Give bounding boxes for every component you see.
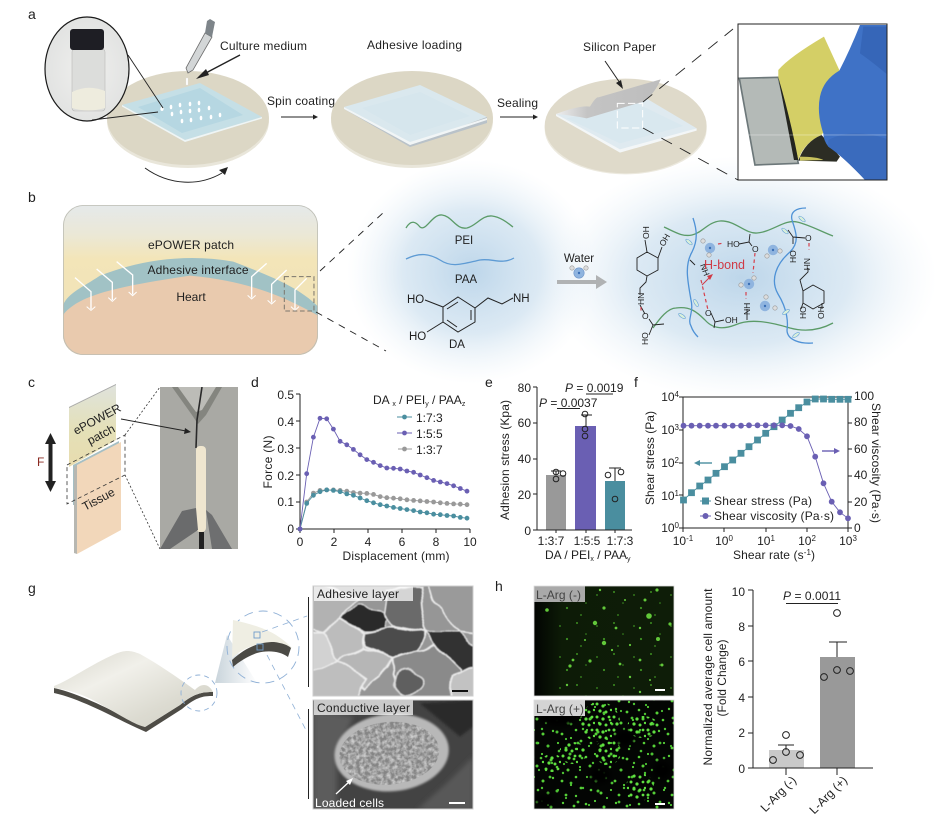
legend: Shear stress (Pa)	[714, 494, 812, 508]
labels: ePOWER patch	[148, 238, 234, 252]
arrow: spin coating	[267, 94, 335, 120]
ticks: 60	[518, 416, 531, 430]
y title	[701, 588, 729, 766]
titles	[498, 400, 631, 563]
right ticks: 100	[854, 389, 874, 403]
cross links	[678, 215, 806, 339]
x ticks: 10	[673, 534, 686, 548]
label culture medium: Culture medium	[220, 39, 307, 53]
PAA: PAA	[455, 274, 477, 286]
silicon paper label	[583, 40, 656, 89]
centre groups: NH	[742, 303, 752, 315]
legend: / PEI	[396, 393, 425, 407]
left ticks	[661, 390, 680, 535]
viscosity series	[684, 425, 848, 518]
panel d: force curve: d	[251, 374, 259, 390]
tick labels: 10	[463, 535, 477, 549]
heart schematic	[62, 205, 320, 355]
tick labels: 0	[297, 535, 304, 549]
dopamine structure: HO	[409, 331, 426, 343]
hydrogel network	[636, 208, 833, 345]
zoom dashes	[316, 212, 386, 351]
hydrogel network: OH	[657, 232, 672, 248]
titles: x	[590, 556, 594, 563]
panel b	[28, 189, 833, 355]
plate 1 with glass and droplets	[107, 71, 269, 168]
background glow	[347, 156, 937, 400]
x ticks: 10	[798, 534, 811, 548]
right ticks: 80	[854, 415, 868, 429]
tick labels: 0.4	[277, 415, 294, 429]
x ticks: 10	[757, 534, 770, 548]
p values: P = 0.0037	[539, 396, 598, 410]
ticks: 20	[518, 488, 531, 502]
left ticks: 4	[675, 390, 680, 399]
plate 3 with silicon paper	[545, 79, 707, 174]
legend	[373, 393, 466, 457]
vial inset	[45, 17, 163, 121]
hydrogel network: HN	[636, 293, 646, 305]
photo of peeled patch	[738, 24, 890, 182]
label b: b	[28, 189, 36, 205]
titles: Shear viscosity (Pa·s)	[869, 403, 883, 523]
tensile test photo	[160, 387, 238, 549]
bracket lines	[308, 597, 310, 799]
loaded cells label: Loaded cells	[315, 796, 384, 810]
panel f: rheology: f	[634, 374, 638, 390]
ticks	[732, 585, 745, 776]
labels: Heart	[176, 290, 206, 304]
panel h	[495, 578, 873, 817]
tick labels: 0.3	[277, 442, 294, 456]
panel f: rheology	[634, 374, 883, 562]
bars	[546, 426, 625, 530]
left dopamine	[637, 240, 664, 335]
tick labels: 0.5	[277, 388, 294, 402]
H-bond label	[702, 258, 745, 285]
label culture medium	[196, 39, 307, 79]
legend	[700, 494, 834, 523]
bar chart: cell amount	[701, 585, 873, 817]
hydrogel network: O	[805, 233, 812, 243]
x ticks: 10	[839, 534, 852, 548]
centre groups: OH	[725, 315, 738, 325]
PEI: PEI	[455, 235, 473, 247]
tick labels: 2	[331, 535, 338, 549]
hydrogel network: HO	[788, 250, 798, 263]
titles: / PAA	[594, 548, 627, 562]
micrograph L-Arg (-): L-Arg (-)	[536, 588, 581, 602]
ticks: 4	[738, 691, 745, 705]
panel d: force curve	[251, 374, 477, 563]
panel a	[28, 6, 890, 182]
titles	[643, 403, 883, 562]
ticks: 80	[518, 381, 531, 395]
dopamine structure	[407, 293, 530, 351]
ticks: 8	[738, 620, 745, 634]
silicon paper label: Silicon Paper	[583, 40, 656, 54]
category labels: L-Arg (-)	[758, 773, 799, 815]
loaded cells label	[315, 778, 384, 810]
force arrow	[37, 433, 56, 492]
label a: a	[28, 6, 36, 22]
legend: y	[425, 401, 429, 408]
hydrogel network: HO	[798, 306, 808, 319]
category labels: L-Arg (+)	[807, 773, 850, 817]
direction arrows	[694, 448, 840, 466]
water molecules	[701, 239, 782, 311]
titles: Shear rate (s	[733, 548, 804, 562]
label: Adhesive layer	[317, 587, 399, 601]
left ticks: 10	[661, 390, 675, 404]
titles: -1	[804, 548, 811, 557]
centre groups	[698, 239, 759, 325]
arrow: spin coating: Spin coating	[267, 94, 335, 108]
x ticks: 3	[852, 534, 857, 543]
tick labels	[277, 388, 477, 549]
panel e: bar chart: e	[485, 374, 493, 390]
p values: P = 0.0019	[565, 381, 624, 395]
H-bond label: H-bond	[704, 258, 745, 272]
left ticks: 10	[661, 456, 675, 470]
axes	[296, 394, 470, 533]
dopamine structure: DA	[449, 339, 465, 351]
ticks: 1:7:3	[607, 534, 634, 548]
ticks: 0	[738, 762, 745, 776]
left ticks: 0	[675, 521, 680, 530]
legend: / PAA	[429, 393, 462, 407]
axis titles	[261, 436, 450, 563]
left ticks: 1	[675, 489, 680, 498]
right ticks	[854, 389, 874, 535]
p value: P = 0.0011	[783, 589, 841, 603]
series gray	[300, 490, 467, 529]
patch and tissue schematic: Tissue	[80, 485, 118, 514]
SEM: conductive layer	[313, 700, 473, 810]
ticks: 1:5:5	[574, 534, 601, 548]
titles: )	[811, 548, 815, 562]
arrow to patch	[121, 419, 191, 434]
force arrow: F	[37, 455, 44, 469]
labels: Adhesive interface	[148, 263, 249, 277]
panel g	[28, 577, 487, 810]
label c: c	[28, 374, 35, 390]
left ticks: 3	[675, 423, 680, 432]
rotation arrow	[145, 167, 228, 182]
category labels	[758, 773, 850, 817]
axis titles: Force (N)	[261, 436, 275, 488]
SEM: conductive layer: Conductive layer	[317, 701, 410, 715]
axes and error bars	[533, 387, 632, 533]
y title: (Fold Change)	[715, 640, 729, 716]
right ticks: 40	[854, 468, 868, 482]
patch illustration	[54, 651, 213, 732]
x ticks: 2	[811, 534, 816, 543]
plate 2: Adhesive loading	[367, 38, 462, 52]
patch and tissue schematic	[67, 384, 125, 554]
tick labels: 0.2	[277, 469, 294, 483]
tick labels: 0.1	[277, 495, 294, 509]
hydrogel network: NH	[802, 258, 812, 270]
patch and tissue schematic: patch	[85, 422, 117, 448]
x ticks: -1	[686, 534, 694, 543]
stress series	[684, 399, 848, 500]
panel e: bar chart	[485, 374, 634, 563]
water arrow: Water	[564, 253, 594, 265]
right ticks: 60	[854, 442, 868, 456]
hydrogen bonds	[641, 243, 809, 312]
micrograph L-Arg (+): L-Arg (+)	[536, 702, 584, 716]
hydrogel network: OH	[641, 226, 651, 239]
plate 2	[331, 38, 493, 168]
axes, error bars and points	[748, 590, 873, 775]
series teal	[300, 490, 467, 529]
tick labels: 6	[399, 535, 406, 549]
ticks	[518, 381, 634, 548]
patch and tissue schematic: ePOWER	[71, 401, 124, 438]
legend: DA	[373, 393, 389, 407]
hydrogel network: HO	[640, 332, 650, 345]
hydrogel network: O	[642, 311, 649, 321]
x ticks	[673, 534, 857, 548]
panel c	[28, 374, 238, 554]
legend: z	[462, 401, 466, 408]
right dopamine	[788, 230, 824, 309]
tick labels: 4	[365, 535, 372, 549]
left ticks: 2	[675, 456, 680, 465]
y title: Normalized average cell amount	[701, 588, 715, 766]
centre groups: O	[705, 308, 712, 318]
legend: 1:7:3	[416, 411, 443, 425]
water arrow	[557, 253, 607, 289]
centre groups: O	[752, 244, 759, 254]
arrow: sealing: Sealing	[497, 96, 538, 110]
p values	[539, 381, 624, 410]
centre groups: HO	[727, 239, 740, 249]
right ticks: 20	[854, 495, 868, 509]
left ticks: 10	[661, 521, 675, 535]
zoom dashes	[643, 29, 738, 180]
zoom dots	[125, 387, 160, 549]
legend: 1:3:7	[416, 443, 443, 457]
titles: y	[627, 556, 631, 563]
polymer chains	[653, 208, 833, 343]
ticks: 6	[738, 655, 745, 669]
series purple	[300, 418, 467, 529]
titles: Adhesion stress (Kpa)	[498, 400, 512, 520]
SEM: adhesive layer	[312, 586, 474, 696]
bars	[769, 657, 855, 768]
polymer legend	[406, 215, 530, 351]
dopamine structure: HO	[407, 294, 424, 306]
tick labels: 8	[433, 535, 440, 549]
right ticks: 0	[854, 521, 861, 535]
panel h: h	[495, 578, 503, 594]
micrograph L-Arg (-)	[534, 586, 674, 696]
legend: x	[392, 401, 396, 408]
panel g: g	[28, 580, 36, 596]
ticks: 10	[732, 585, 745, 599]
centre groups: NH	[698, 262, 712, 277]
ticks: 40	[518, 452, 531, 466]
x ticks: 1	[770, 534, 775, 543]
pipette	[186, 19, 215, 85]
ticks: 2	[738, 726, 745, 740]
legend: 1:5:5	[416, 427, 443, 441]
dopamine structure: NH	[513, 293, 530, 305]
left ticks: 10	[661, 489, 675, 503]
left ticks: 10	[661, 423, 675, 437]
titles: Shear stress (Pa)	[643, 411, 657, 505]
white force arrows	[75, 262, 314, 311]
legend: Shear viscosity (Pa·s)	[714, 509, 834, 523]
hydrogel network: OH	[816, 306, 826, 319]
titles: DA / PEI	[545, 548, 590, 562]
magnified section	[181, 611, 307, 732]
ticks: 0	[524, 524, 531, 538]
x ticks: 0	[728, 534, 733, 543]
x ticks: 10	[715, 534, 728, 548]
labels	[148, 238, 249, 304]
tick labels: 0	[287, 522, 294, 536]
axis titles: Displacement (mm)	[342, 549, 450, 563]
micrograph L-Arg (+)	[534, 700, 674, 809]
arrow: sealing	[497, 96, 538, 120]
ticks: 1:3:7	[538, 534, 565, 548]
axes box	[679, 397, 852, 532]
